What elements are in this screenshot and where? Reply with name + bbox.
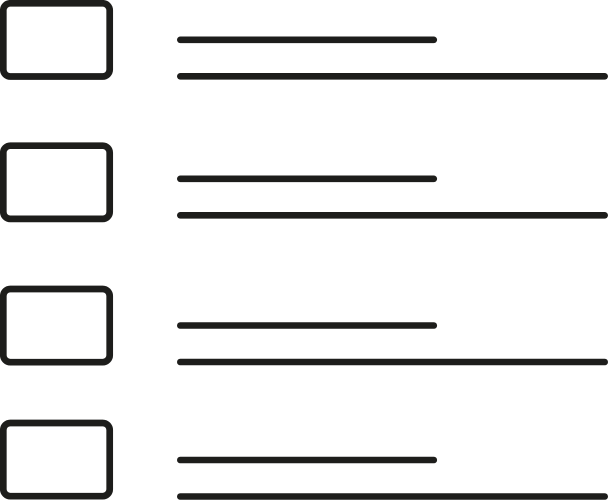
long text line 1 <box>180 73 605 80</box>
long text line 3 <box>180 359 605 365</box>
list row 2 <box>3 146 605 219</box>
icon: empty box 3 <box>3 289 110 362</box>
icon: empty box 1 <box>3 3 110 76</box>
long text line 4 <box>180 493 605 500</box>
list row 3 <box>3 289 605 362</box>
list row 1 <box>3 3 605 76</box>
short text line 3 <box>180 322 434 329</box>
long text line 2 <box>180 212 605 219</box>
icon: empty box 2 <box>3 146 110 219</box>
short text line 1 <box>180 36 434 43</box>
short text line 2 <box>180 176 434 182</box>
list row 4 <box>3 423 605 496</box>
icon: empty box 4 <box>3 423 110 496</box>
short text line 4 <box>180 457 434 463</box>
